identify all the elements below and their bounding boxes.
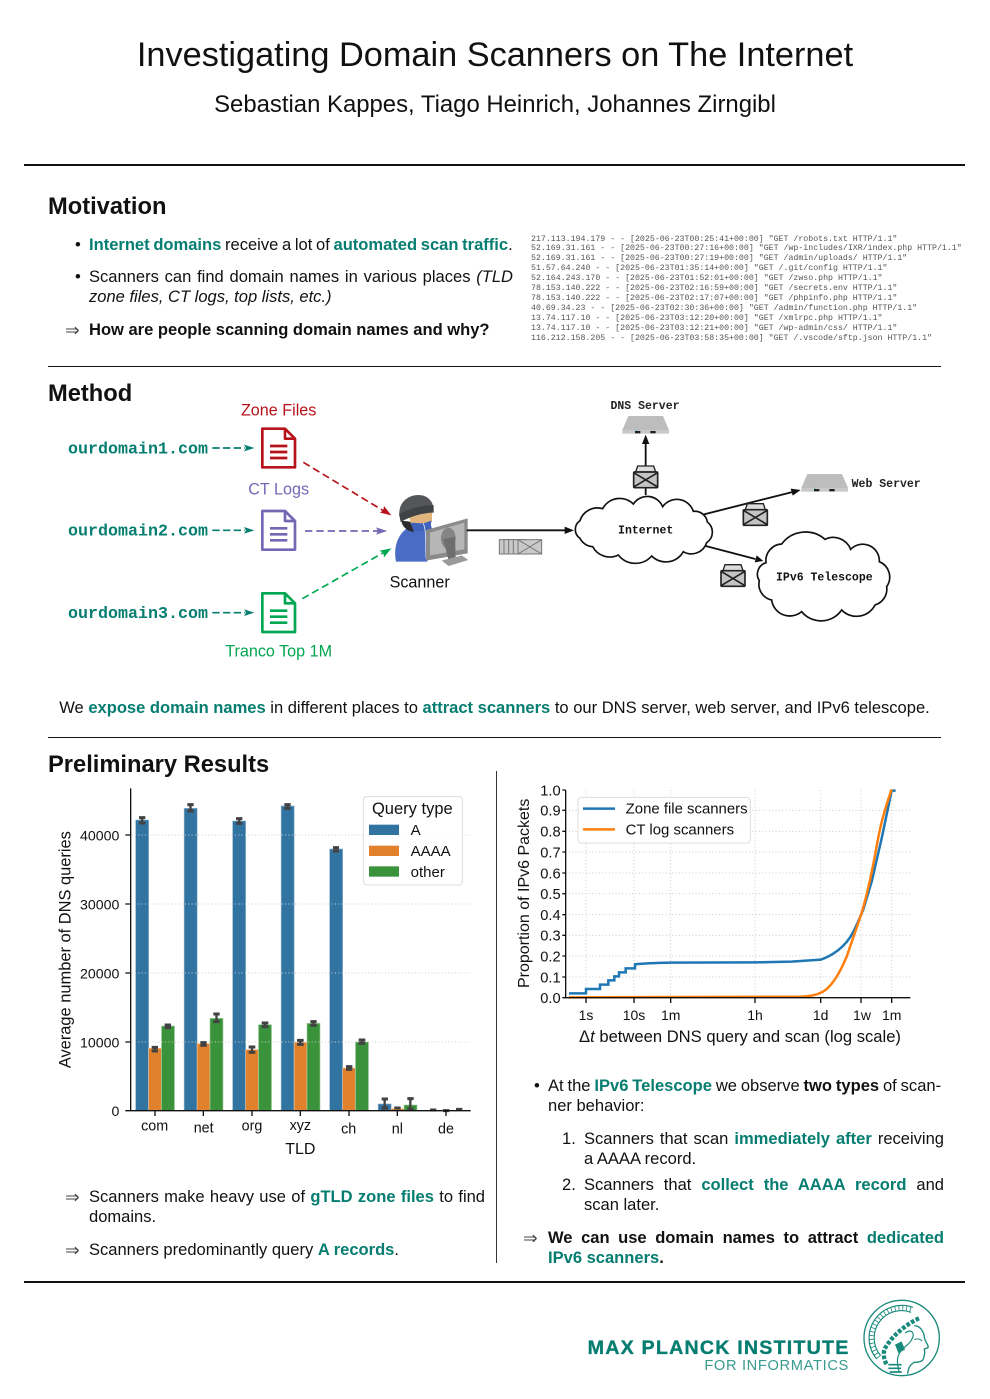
arrow: scanner to internet	[467, 527, 574, 534]
icon: DNS server	[622, 416, 669, 434]
x axis title: TLD	[285, 1141, 315, 1158]
CDF chart: IPv6 packets over time	[516, 783, 910, 1046]
scanner type 2: scan later.	[584, 1195, 659, 1214]
telescope observation: ner behavior:	[548, 1096, 644, 1115]
y tick labels: 0.5	[540, 887, 561, 903]
x tick labels: 1h	[747, 1007, 763, 1023]
logo wordmark: FOR INFORMATICS	[704, 1358, 849, 1374]
x tick labels: 10s	[623, 1007, 645, 1023]
domain labels	[68, 440, 208, 624]
source: CT Logs: CT Logs	[248, 480, 309, 498]
heading: Motivation: Motivation	[48, 194, 166, 220]
legend: other	[411, 864, 445, 881]
scanner type 1: a AAAA record.	[584, 1149, 696, 1168]
scanner type 1: 1.	[562, 1129, 576, 1148]
icon: packet stack	[499, 540, 542, 554]
arrow: zone files to scanner	[303, 462, 391, 515]
takeaway: A records: ⇒	[65, 1241, 80, 1261]
x tick labels	[141, 1118, 454, 1137]
cloud: Internet	[575, 496, 712, 563]
y tick labels: 0.0	[540, 991, 561, 1007]
curve: CT log scanners	[569, 789, 892, 997]
cloud: IPv6 Telescope	[757, 532, 890, 621]
motivation bullet 1: Internet domains receive a lot of automated scan traffic.	[89, 235, 513, 254]
logo: Max Planck Institute for Informatics	[588, 1300, 940, 1376]
arrow: internet to telescope	[697, 544, 763, 562]
scanner type 2: 2.	[562, 1175, 576, 1194]
legend	[363, 797, 462, 885]
scanner type 1	[562, 1129, 944, 1168]
domain labels: ourdomain1.com	[68, 440, 208, 459]
scanner type 1: Scanners that scan immediately after receiving	[584, 1129, 944, 1148]
y tick labels: 0.4	[540, 908, 561, 924]
y tick labels: 0.9	[540, 804, 561, 820]
cloud: IPv6 Telescope: IPv6 Telescope	[776, 571, 873, 584]
x tick labels: org	[242, 1119, 262, 1135]
takeaway: gTLD zone files: ⇒	[65, 1188, 80, 1208]
x tick labels: 1s	[579, 1007, 593, 1023]
takeaway: A records: Scanners predominantly query A records.	[89, 1240, 399, 1259]
source: Zone Files	[241, 401, 316, 467]
legend: AAAA	[411, 843, 451, 860]
y tick labels: 0.6	[540, 866, 561, 882]
arrow: Tranco to scanner	[302, 548, 391, 599]
y tick labels: 10000	[80, 1035, 119, 1051]
logo emblem: Minerva	[864, 1300, 939, 1376]
icon: envelope to web	[743, 504, 767, 525]
motivation bullet 2: •	[75, 267, 81, 286]
source: Tranco Top 1M: Tranco Top 1M	[225, 643, 332, 661]
conclusion: IPv6 scanners.	[548, 1248, 664, 1267]
legend: A	[411, 822, 421, 839]
y tick labels: 0.1	[540, 970, 561, 986]
axes	[562, 790, 910, 1003]
telescope observation: At the IPv6 Telescope we observe two types of scan-	[548, 1076, 941, 1095]
x tick labels: 1m	[661, 1007, 680, 1023]
bar chart: DNS queries per TLD	[56, 788, 471, 1158]
motivation bullet 2: Scanners can find domain names in various places (TLD	[89, 267, 513, 286]
heading: Method: Method	[48, 381, 132, 407]
y tick labels: 20000	[80, 966, 119, 982]
legend	[578, 797, 750, 843]
x tick labels: net	[194, 1121, 214, 1137]
takeaway: gTLD zone files: Scanners make heavy use of gTLD zone files to find	[89, 1187, 485, 1206]
motivation question: How are people scanning domain names and why?	[89, 320, 490, 339]
x axis title: Δt between DNS query and scan (log scale)	[579, 1027, 901, 1046]
source: Zone Files: Zone Files	[241, 401, 316, 419]
logo wordmark	[588, 1337, 849, 1374]
motivation bullet 2: zone files, CT logs, top lists, etc.)	[89, 287, 332, 306]
y tick labels: 0.2	[540, 949, 561, 965]
bars	[136, 806, 417, 1111]
x tick labels: 1w	[853, 1007, 872, 1023]
y tick labels: 0.7	[540, 845, 561, 861]
telescope observation: •	[534, 1076, 540, 1095]
y tick labels	[80, 828, 119, 1120]
y tick labels: 40000	[80, 828, 119, 844]
conclusion	[523, 1228, 944, 1267]
takeaway: gTLD zone files	[65, 1187, 485, 1226]
y tick labels: 0.8	[540, 825, 561, 841]
conclusion: We can use domain names to attract dedicated	[548, 1228, 944, 1247]
domain labels: ourdomain3.com	[68, 605, 208, 624]
label: DNS Server: DNS Server	[610, 400, 680, 413]
x tick labels: 1d	[813, 1007, 828, 1023]
icon: envelope to telescope	[721, 565, 745, 586]
source: CT Logs	[248, 480, 309, 550]
arrow: internet to DNS server	[642, 435, 649, 495]
domain labels: ourdomain2.com	[68, 523, 208, 542]
y tick labels: 0.3	[540, 929, 561, 945]
method diagram	[68, 400, 921, 661]
y axis title: Proportion of IPv6 Packets	[516, 799, 533, 988]
authors: Sebastian Kappes, Tiago Heinrich, Johannes Zirngibl	[214, 91, 776, 118]
label: Web Server: Web Server	[852, 478, 921, 491]
logo wordmark: MAX PLANCK INSTITUTE	[588, 1337, 848, 1359]
legend: CT log scanners	[626, 821, 734, 838]
title: Investigating Domain Scanners on The Internet	[137, 36, 853, 74]
label: Scanner: Scanner	[390, 573, 450, 591]
icon: scanner person at monitor	[395, 495, 468, 566]
motivation bullet 2	[75, 267, 513, 306]
arrow: internet to web server	[700, 489, 801, 515]
axes	[125, 788, 471, 1116]
x tick labels: 1m	[882, 1007, 901, 1023]
y tick labels	[540, 783, 561, 1007]
heading: Preliminary Results: Preliminary Results	[48, 752, 269, 778]
y tick labels: 0	[111, 1104, 119, 1120]
takeaway: gTLD zone files: domains.	[89, 1207, 156, 1226]
y tick labels: 30000	[80, 897, 119, 913]
arrow: CT logs to scanner	[305, 527, 387, 535]
legend: Zone file scanners	[626, 801, 748, 818]
telescope observation	[534, 1076, 941, 1115]
source: Tranco Top 1M	[225, 593, 332, 661]
x tick labels	[579, 1007, 901, 1023]
conclusion: ⇒	[523, 1229, 538, 1249]
motivation question: ⇒	[65, 321, 80, 341]
y tick labels: 1.0	[540, 783, 561, 799]
scanner type 2	[562, 1175, 944, 1214]
error bars	[139, 804, 462, 1111]
y axis title: Average number of DNS queries	[56, 831, 74, 1068]
curve: zone file scanners	[569, 791, 896, 993]
method caption: We expose domain names in different places to attract scanners to our DNS server, web server, and IPv6 telescope.	[59, 698, 930, 717]
x tick labels: com	[141, 1119, 168, 1135]
x tick labels: ch	[341, 1121, 356, 1137]
motivation bullet 1: •	[75, 235, 81, 254]
cloud: Internet: Internet	[618, 525, 673, 538]
scanner type 2: Scanners that collect the AAAA record and	[584, 1175, 944, 1194]
icon: envelope to DNS	[634, 466, 658, 488]
arrows: domains to documents	[212, 445, 254, 616]
server log excerpt: 217.113.194.179 - - [2025-06-23T00:25:41+00:00] "GET /robots.txt HTTP/1.1" 52.169.31.161 - - [2025-06-23T00:27:16+00:00] "GET /wp-includes/IXR/index.php HTTP/1.1" 52.169.31.161 - - [2025-06-23T00:27:19+00:00] "GET /admin/uploads/ HTTP/1.1" 51.57.64.240 - - [2025-06-23T01:35:14+00:00] "GET /.git/config HTTP/1.1" 52.164.243.170 - - [2025-06-23T01:52:01+00:00] "GET /zwso.php HTTP/1.1" 78.153.140.222 - - [2025-06-23T02:16:59+00:00] "GET /secrets.env HTTP/1.1" 78.153.140.222 - - [2025-06-23T02:17:07+00:00] "GET /phpinfo.php HTTP/1.1" 40.69.34.23 - - [2025-06-23T02:30:36+00:00] "GET /admin/function.php HTTP/1.1" 13.74.117.10 - - [2025-06-23T03:12:20+00:00] "GET /xmlrpc.php HTTP/1.1" 13.74.117.10 - - [2025-06-23T03:12:21+00:00] "GET /wp-admin/css/ HTTP/1.1" 116.212.158.205 - - [2025-06-23T03:58:35+00:00] "GET /.vscode/sftp.json HTTP/1.1"	[531, 234, 962, 343]
legend: Query type	[372, 800, 453, 818]
x tick labels: xyz	[290, 1118, 311, 1134]
x tick labels: nl	[392, 1121, 403, 1137]
icon: web server	[801, 474, 848, 492]
x tick labels: de	[438, 1121, 454, 1137]
